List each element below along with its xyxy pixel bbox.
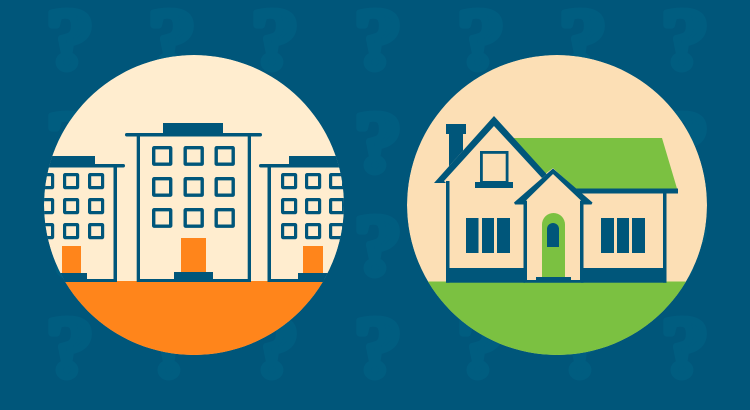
upper window: [475, 152, 513, 188]
door window: [547, 223, 559, 247]
question mark pattern: ?: [661, 299, 709, 395]
right windows: [601, 218, 645, 253]
question mark pattern: ?: [148, 299, 196, 395]
question mark pattern: ?: [354, 299, 402, 395]
question mark pattern: ?: [661, 197, 709, 293]
main gable: [449, 150, 542, 178]
green ground: [428, 282, 686, 355]
main gable roof line: [434, 116, 547, 183]
question mark pattern: ?: [46, 94, 94, 190]
question mark pattern: ?: [661, 94, 709, 190]
panel: house circle: [407, 55, 707, 356]
front door: [542, 213, 565, 277]
left windows: [466, 218, 510, 253]
right wing eave: [576, 188, 678, 194]
question mark pattern: ?: [457, 197, 505, 293]
infographic canvas: [44, 55, 707, 355]
question mark pattern: ?: [559, 299, 607, 395]
foundation: [446, 268, 525, 283]
porch step: [536, 277, 571, 280]
question mark pattern: ?: [251, 299, 299, 395]
question mark pattern: ?: [354, 94, 402, 190]
question mark pattern: ?: [251, 94, 299, 190]
center apartment building: [125, 123, 262, 282]
orange ground: [64, 281, 324, 355]
icon: chimney: [446, 124, 466, 166]
question mark pattern: ?: [148, 197, 196, 293]
porch gable: [542, 174, 580, 192]
question mark pattern: ?: [457, 94, 505, 190]
right apartment building: [259, 156, 349, 282]
question mark pattern: ?: [559, 197, 607, 293]
main gable left wall: [446, 181, 450, 283]
porch roof line: [514, 168, 592, 283]
question mark pattern: ?: [46, 197, 94, 293]
panel: apartment buildings circle: [39, 55, 349, 356]
question mark pattern: ?: [251, 197, 299, 293]
question mark pattern: ?: [148, 94, 196, 190]
question mark pattern: ?: [559, 94, 607, 190]
house: [434, 116, 678, 283]
question mark pattern: ?: [354, 197, 402, 293]
question mark pattern: ?: [46, 299, 94, 395]
question mark pattern: ?: [457, 299, 505, 395]
right wing wall: [663, 189, 666, 283]
green side roof: [510, 138, 677, 188]
left apartment building: [39, 156, 125, 282]
